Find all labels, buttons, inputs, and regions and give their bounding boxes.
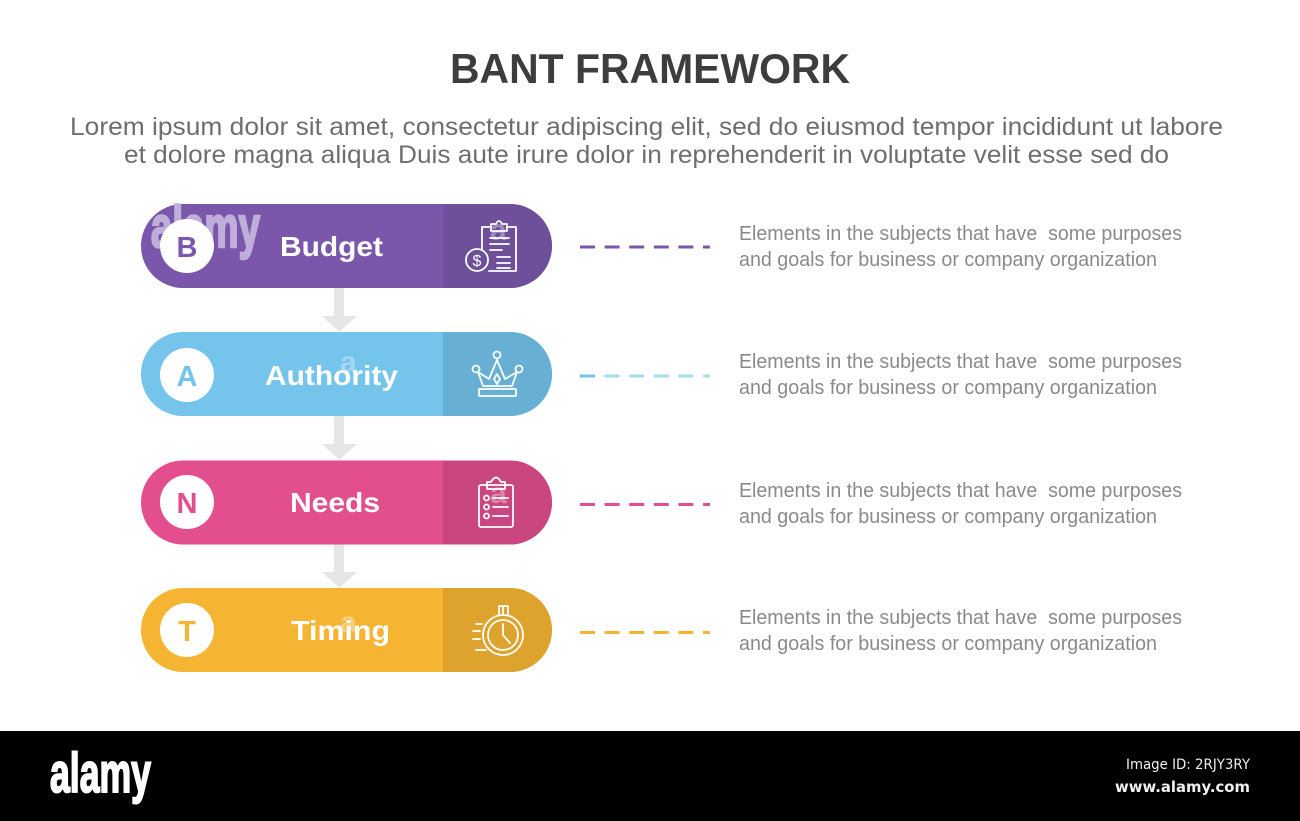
website: www.alamy.com (1115, 778, 1250, 796)
budget icon section (443, 204, 552, 288)
authority letter badge: A (177, 361, 198, 393)
timing label: Timing (291, 615, 390, 646)
arrow: needs to timing (322, 544, 357, 588)
description: authority: and goals for business or company organization (739, 377, 1157, 399)
footer logo: alamy (50, 741, 151, 804)
arrow: budget to authority (322, 288, 357, 332)
description: needs: and goals for business or company organization (739, 506, 1157, 528)
icon: checklist clipboard (479, 478, 513, 527)
authority label: Authority (265, 360, 398, 391)
faint watermark on budget icon: a (490, 214, 507, 247)
dashed connector: timing (580, 631, 710, 634)
dashed connector: authority (580, 374, 710, 378)
watermark: alamy (151, 195, 260, 260)
icon: crown (472, 352, 522, 396)
budget letter badge: B (177, 232, 197, 264)
timing letter badge: T (178, 616, 196, 648)
description: budget (739, 223, 1182, 271)
arrow: authority to needs (322, 416, 357, 460)
title: BANT FRAMEWORK (450, 45, 850, 92)
panel: needs row (141, 460, 552, 544)
panel: authority row (141, 332, 552, 416)
subtitle text block (70, 113, 1223, 169)
panel: timing row (141, 588, 552, 672)
image id: Image ID: 2RJY3RY (1126, 757, 1250, 773)
faint watermark on authority: a (340, 346, 357, 379)
faint watermark on timing: a (340, 606, 357, 639)
dashed connector: budget (580, 246, 710, 248)
authority letter badge (160, 348, 214, 402)
dashed connector: needs (580, 503, 710, 506)
description: budget: and goals for business or company organization (739, 249, 1157, 271)
budget pill (141, 204, 552, 288)
authority icon section (443, 332, 552, 416)
needs pill (141, 460, 552, 544)
description: needs (739, 480, 1182, 528)
timing pill (141, 588, 552, 672)
description: budget: Elements in the subjects that have some purposes (739, 223, 1182, 245)
panel: budget row (141, 195, 552, 288)
timing letter badge (160, 603, 214, 657)
subtitle text block: Lorem ipsum dolor sit amet, consectetur adipiscing elit, sed do eiusmod tempor incididunt ut labore (70, 113, 1223, 141)
icon: clipboard with dollar (466, 221, 516, 271)
needs letter badge: N (177, 488, 197, 520)
timing icon section (443, 588, 552, 672)
faint watermark on needs icon: a (490, 477, 507, 510)
footer bar (0, 731, 1300, 821)
description: needs: Elements in the subjects that have some purposes (739, 480, 1182, 502)
icon: stopwatch (473, 606, 523, 655)
subtitle text block: et dolore magna aliqua Duis aute irure dolor in reprehenderit in voluptate velit esse sed do (124, 141, 1169, 169)
icon: clipboard with dollar: $ (473, 253, 482, 270)
description: timing: Elements in the subjects that have some purposes (739, 607, 1182, 629)
description: authority: Elements in the subjects that have some purposes (739, 351, 1182, 373)
needs label: Needs (290, 487, 380, 518)
description: timing (739, 607, 1182, 655)
budget letter badge (160, 219, 214, 273)
needs letter badge (160, 475, 214, 529)
description: timing: and goals for business or company organization (739, 633, 1157, 655)
budget label: Budget (280, 231, 383, 262)
needs icon section (443, 460, 552, 544)
authority pill (141, 332, 552, 416)
description: authority (739, 351, 1182, 399)
